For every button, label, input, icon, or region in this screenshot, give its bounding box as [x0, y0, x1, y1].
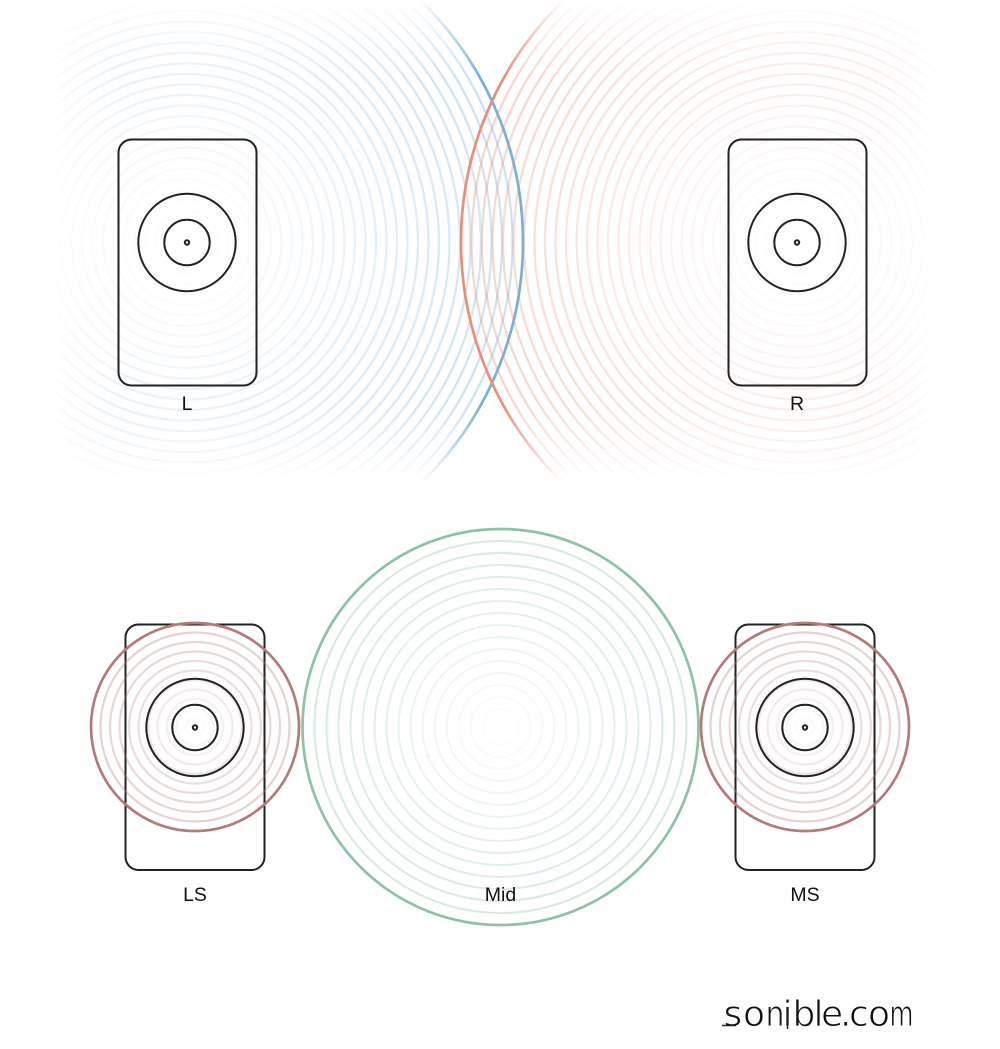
logo: sonible.com: c [849, 994, 869, 1035]
label: R: R [790, 393, 804, 415]
speaker: MS [736, 624, 874, 870]
speaker: LS [126, 624, 264, 870]
sound waves: mid [302, 529, 698, 925]
logo: sonible.com: n [766, 994, 784, 1035]
logo: sonible.com: l [814, 994, 824, 1035]
driver: MS [756, 679, 854, 776]
logo: sonible.com: o [868, 994, 890, 1035]
driver: LS [146, 679, 244, 776]
logo: sonible.com: o [743, 994, 765, 1035]
logo: sonible.com: b [792, 994, 815, 1035]
sound waves: right side [701, 623, 909, 831]
logo: sonible.com: . [840, 994, 851, 1035]
label: MS: MS [790, 884, 820, 906]
label: L: L [182, 393, 193, 415]
sound waves: left channel [65, 4, 524, 478]
logo: sonible.com: e [821, 994, 843, 1035]
logo: sonible.com: m [890, 994, 914, 1035]
label: Mid: Mid [485, 884, 516, 906]
logo: sonible.com [722, 994, 914, 1035]
speaker: R [728, 140, 866, 386]
logo: sonible.com: s [724, 994, 742, 1035]
label: LS: LS [183, 884, 207, 906]
sound waves: left side [91, 623, 299, 831]
speaker: L [118, 140, 256, 386]
logo: sonible.com: i [782, 994, 793, 1035]
sound waves: right channel [460, 4, 919, 478]
